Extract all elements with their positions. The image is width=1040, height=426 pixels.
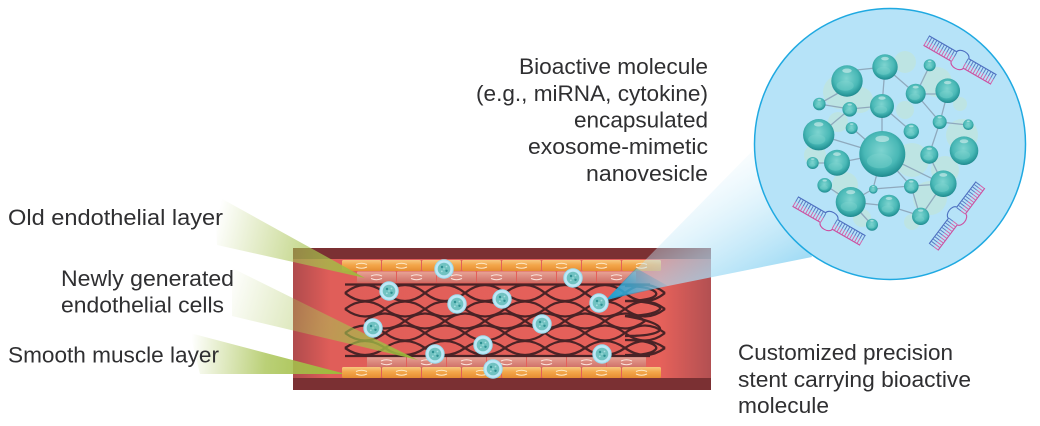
connecting lines	[813, 65, 968, 225]
icon: RNA hairpin bottom right	[926, 179, 988, 253]
label: smooth muscle layer: Smooth muscle layer	[8, 342, 219, 368]
label: bioactive molecule: (e.g., miRNA, cytokine)	[476, 81, 708, 106]
icon: RNA hairpin bottom left	[790, 193, 868, 249]
label: bioactive molecule	[476, 54, 708, 186]
teal spheres	[803, 54, 978, 231]
label: customized precision stent: Customized precision	[738, 340, 953, 365]
label: bioactive molecule: exosome-mimetic	[528, 134, 708, 159]
vessel upper wall	[293, 248, 711, 259]
callout beam: magnified view of nanovesicle	[606, 133, 812, 300]
stent mesh	[345, 284, 665, 356]
new endothelial lower cell row	[367, 356, 646, 368]
old endothelial upper cell row	[342, 260, 661, 271]
label: customized precision stent: molecule	[738, 393, 829, 418]
pale vesicle bubbles	[804, 51, 978, 230]
label: newly generated endothelial cells: endothelial cells	[61, 292, 224, 318]
label: customized precision stent: stent carrying bioactive	[738, 367, 971, 392]
label: bioactive molecule: encapsulated	[574, 108, 708, 132]
label: bioactive molecule: Bioactive molecule	[519, 54, 708, 79]
label: customized precision stent	[738, 340, 971, 418]
vessel lumen	[293, 248, 711, 390]
panel: blood vessel cross-section	[293, 248, 711, 390]
label: newly generated endothelial cells	[61, 266, 234, 318]
nanovesicles in the vessel	[364, 260, 611, 378]
vessel lower wall	[293, 378, 711, 390]
circle background	[754, 8, 1026, 280]
callout beam: smooth muscle layer	[190, 333, 342, 374]
icon: RNA hairpin top right	[921, 32, 999, 88]
label: old endothelial layer: Old endothelial layer	[8, 205, 223, 230]
label: newly generated endothelial cells: Newly generated	[61, 266, 234, 291]
callout beam: newly generated endothelial cells	[232, 268, 418, 360]
panel: magnified nanovesicle circle	[754, 8, 1026, 280]
label: bioactive molecule: nanovesicle	[586, 161, 708, 186]
smooth muscle lower cell row	[342, 367, 661, 378]
new endothelial upper cell row	[357, 272, 636, 282]
callout beam: old endothelial layer	[215, 195, 365, 278]
